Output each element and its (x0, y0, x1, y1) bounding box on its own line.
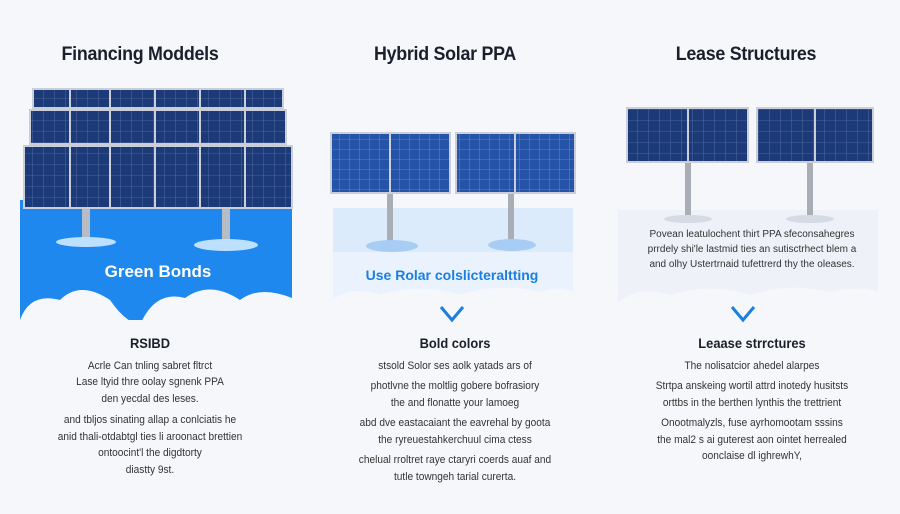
heading: hybrid solar ppa: Hybrid Solar PPA (374, 44, 516, 65)
icon: solar array 2 (331, 133, 575, 252)
text: lease inner: Povean leatulochent thirt PPA sfeconsahegres (650, 229, 854, 240)
text block 3: The nolisatcior ahedel alarpes Strtpa anskeing wortil attrd inotedy husitsts (656, 360, 848, 392)
text: lease inner (648, 229, 857, 270)
panel: lease backdrop (618, 210, 878, 310)
heading: financing models: Financing Moddels (62, 44, 218, 65)
text block 3: orttbs in the berthen lynthis the trettrient Onootmalyzls, fuse ayrhomootam sssins (661, 396, 843, 429)
arrow: chevron 3 (732, 307, 754, 320)
label: green bonds: Green Bonds (105, 262, 211, 281)
panel: hybrid backdrop (333, 208, 573, 305)
text block 2: the and flonatte your lamoeg abd dve eastacaiant the eavrehal by goota (360, 396, 550, 429)
text block 1: anid thali-otdabtgl ties li aroonact brettien (58, 430, 242, 442)
text block 1: Acrle Can tnling sabret fltrct (88, 360, 212, 372)
text block 1: RSIBD (130, 335, 170, 351)
arrow: chevron 2 (441, 307, 463, 320)
icon: solar array 1 (24, 89, 292, 251)
label: hybrid: Use Rolar colslicteraltting (366, 267, 538, 283)
text block 3 (656, 335, 848, 462)
icon: solar array 3 (627, 108, 873, 223)
text: lease inner: prrdely shi'le lastmid ties an sutisctrhect blem a (648, 244, 857, 255)
text block 2: tutle towngeh tarial curerta. (394, 470, 516, 482)
text block 1: den yecdal des leses. and tbljos sinating allap a conlciatis he (64, 392, 236, 426)
text block 3: Leaase strrctures (698, 335, 806, 351)
panel: financing models backdrop (20, 200, 292, 330)
text block 2: the ryreuestahkerchuul cima ctess chelual rroltret raye ctaryri coerds auaf and (359, 434, 551, 466)
text block 1 (58, 335, 242, 476)
text block 3: oonclaise dl ighrewhY, (702, 450, 802, 462)
heading: lease structures: Lease Structures (676, 44, 816, 65)
text block 1: ontoocint'l the digdtorty (98, 447, 202, 459)
text block 2 (359, 335, 551, 482)
text block 3: the mal2 s ai guterest aon ointet herrealed (657, 434, 847, 446)
text block 1: diastty 9st. (126, 464, 174, 476)
text block 1: Lase ltyid thre oolay sgnenk PPA (76, 376, 224, 388)
text block 2: stsold Solor ses aolk yatads ars of photlvne the moltlig gobere bofrasiory (371, 360, 539, 392)
text block 2: Bold colors (420, 335, 490, 351)
text: lease inner: and olhy Ustertrnaid tufettrerd thy the oleases. (649, 259, 855, 270)
